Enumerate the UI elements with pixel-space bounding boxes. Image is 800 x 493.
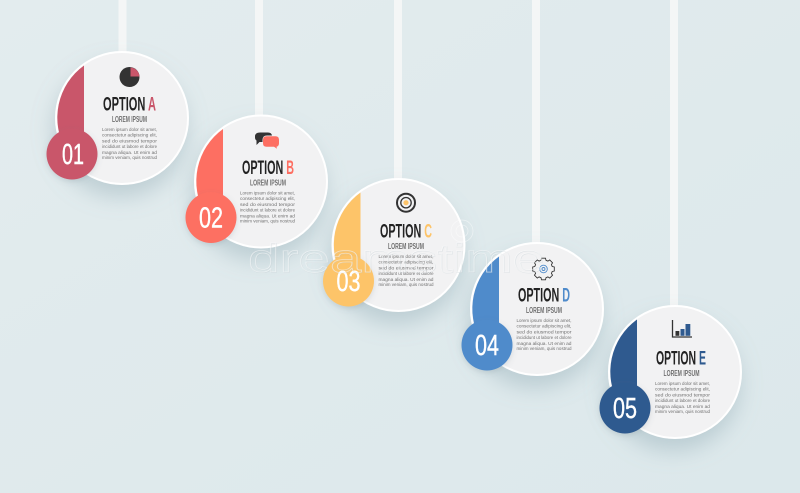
hanging strip A: [118, 0, 126, 54]
body text D: consectetur adipiscing elit,: [516, 324, 572, 329]
hanging strip B: [255, 0, 263, 117]
colour band B: [196, 129, 223, 214]
icon: gear: [533, 258, 554, 280]
colour band A: [57, 66, 84, 150]
number badge 02: [186, 192, 236, 243]
number badge 03: [323, 256, 374, 306]
body text E: sed do eiusmod tempor: [655, 392, 711, 397]
circle B: [195, 116, 327, 248]
circle D: [471, 243, 603, 375]
subheading E: LOREM IPSUM: [664, 369, 700, 378]
number badge 04: [462, 320, 512, 370]
circle A: [56, 52, 188, 184]
watermark: dreamstime: [248, 237, 544, 281]
body text C: sed do eiusmod tempor: [378, 265, 434, 270]
body text B: incididunt ut labore et dolore: [240, 208, 295, 213]
icon: pie chart: [120, 67, 140, 87]
body text E: incididunt ut labore et dolore: [655, 398, 710, 403]
card: option A: [46, 0, 188, 184]
heading C: OPTION C: [380, 222, 432, 242]
heading B: OPTION B: [242, 158, 294, 179]
body text B: magna aliqua. Ut enim ad: [240, 213, 295, 218]
colour band E: [610, 320, 637, 404]
body text C: consectetur adipiscing elit,: [378, 260, 434, 265]
body text C: minim veniam, quis nostrud: [378, 282, 434, 287]
hanging strip C: [394, 0, 402, 181]
number badge 02: 02: [199, 202, 223, 234]
card: option C: [323, 0, 464, 311]
body text A: incididunt ut labore et dolore: [102, 144, 157, 149]
body text A: consectetur adipiscing elit,: [102, 133, 157, 138]
body text A: minim veniam, quis nostrud: [102, 155, 157, 160]
hanging strip E: [670, 0, 678, 308]
subheading B: LOREM IPSUM: [250, 178, 286, 188]
heading E: OPTION E: [656, 348, 706, 370]
circle E: [609, 306, 741, 438]
card: option B: [186, 0, 327, 248]
watermark: dreamstime: [248, 238, 544, 282]
body text C: incididunt ut labore et dolore: [378, 271, 434, 276]
number badge 04: 04: [475, 330, 499, 362]
body text C: Lorem ipsum dolor sit amet,: [378, 254, 434, 259]
icon: bar chart: [672, 320, 692, 337]
subheading D: LOREM IPSUM: [526, 306, 562, 315]
hanging strip D: [532, 0, 540, 245]
body text E: consectetur adipiscing elit,: [655, 387, 710, 392]
body text D: incididunt ut labore et dolore: [516, 335, 572, 340]
body text E: Lorem ipsum dolor sit amet,: [655, 381, 710, 386]
body text D: Lorem ipsum dolor sit amet,: [516, 318, 572, 323]
icon: speech bubbles: [255, 132, 279, 149]
body text B: sed do eiusmod tempor: [240, 202, 296, 207]
number badge 01: [46, 128, 98, 180]
heading D: OPTION D: [518, 286, 570, 306]
number badge 05: [600, 382, 650, 434]
subheading C: LOREM IPSUM: [388, 242, 424, 251]
body text D: magna aliqua. Ut enim ad: [516, 341, 572, 346]
heading A: OPTION A: [103, 94, 156, 116]
circle C: [332, 179, 464, 311]
card: option D: [462, 0, 603, 375]
colour band D: [472, 256, 499, 341]
body text A: sed do eiusmod tempor: [102, 138, 158, 143]
number badge 03: 03: [336, 266, 360, 298]
body text C: [378, 254, 434, 287]
colour band C: [334, 192, 360, 277]
icon: target: [397, 194, 415, 212]
body text A: [102, 127, 158, 160]
body text A: Lorem ipsum dolor sit amet,: [102, 127, 157, 132]
body text E: magna aliqua. Ut enim ad: [655, 404, 710, 409]
watermark: [248, 220, 544, 282]
body text D: minim veniam, quis nostrud: [516, 346, 572, 351]
card: option E: [600, 0, 741, 438]
body text B: [240, 190, 296, 224]
body text B: Lorem ipsum dolor sit amet,: [240, 190, 295, 196]
body text E: [655, 381, 711, 414]
body text D: [516, 318, 572, 351]
body text B: minim veniam, quis nostrud: [240, 218, 295, 224]
body text D: sed do eiusmod tempor: [516, 329, 572, 334]
subheading A: LOREM IPSUM: [112, 115, 147, 124]
number badge 05: 05: [613, 393, 637, 425]
body text A: magna aliqua. Ut enim ad: [102, 150, 157, 155]
number badge 01: 01: [62, 139, 84, 171]
body text E: minim veniam, quis nostrud: [655, 409, 710, 414]
body text C: magna aliqua. Ut enim ad: [378, 277, 434, 282]
body text B: consectetur adipiscing elit,: [240, 196, 295, 201]
